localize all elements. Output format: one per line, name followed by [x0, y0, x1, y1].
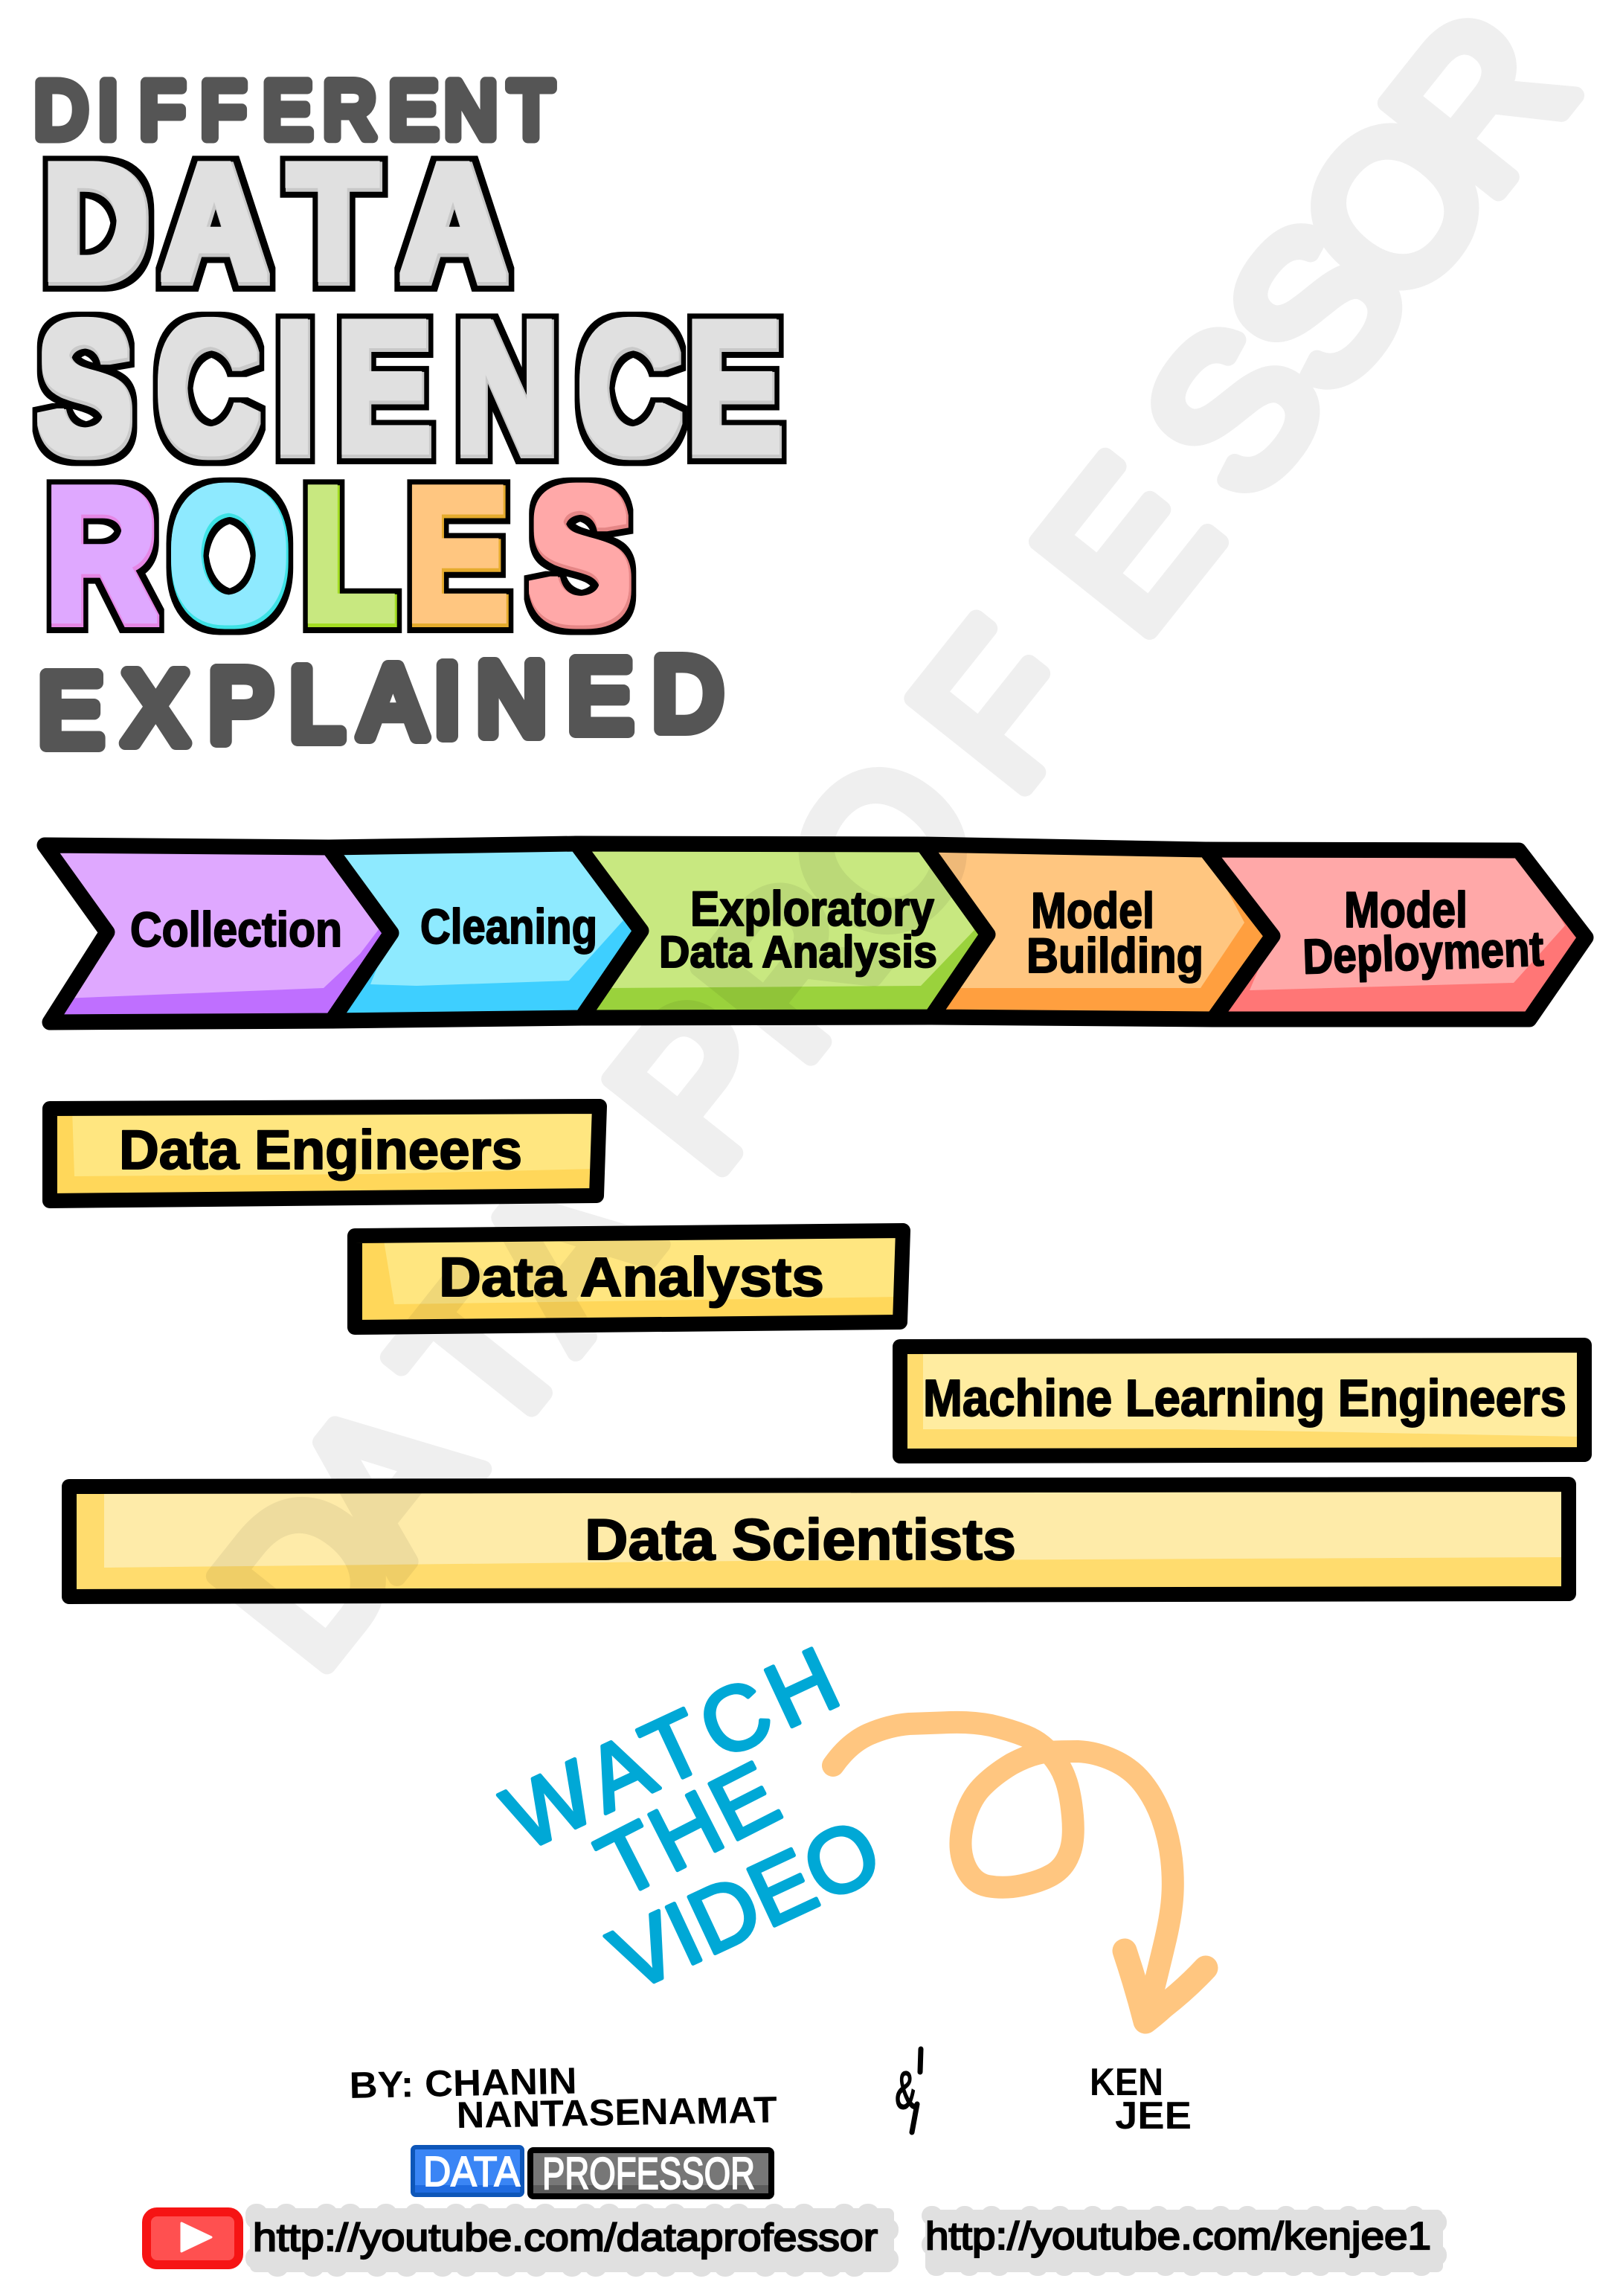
author: Chanin Nantasenamat [349, 2060, 777, 2136]
title line: DATA: DATA [44, 132, 507, 315]
chevron: Collection: Collection [130, 902, 342, 957]
callout word: THE: THE [582, 1742, 794, 1917]
chevron: Cleaning: Cleaning [420, 899, 597, 954]
role bar: Data Scientists: Data Scientists [585, 1507, 1016, 1572]
ampersand [894, 2049, 921, 2132]
logo: Data Professor [413, 2147, 771, 2199]
url text: http://youtube.com/dataprofessor [253, 2216, 878, 2260]
logo tile: DATA: DATA [423, 2148, 520, 2196]
url text: http://youtube.com/kenjee1 [925, 2215, 1431, 2258]
title line: ROLES: R [46, 451, 158, 662]
link: Data Professor channel [147, 2212, 888, 2266]
chevron: Model Building: Model [1031, 882, 1154, 939]
title line: ROLES: O [170, 451, 290, 662]
title line: DIFFERENT: DIFFERENT [34, 65, 553, 155]
chevron: Cleaning [329, 844, 641, 1021]
title line: ROLES: L [302, 451, 397, 662]
role bar: Data Analysts [355, 1231, 903, 1327]
author: Chanin Nantasenamat: BY: CHANIN [349, 2060, 577, 2106]
pipeline chevrons [45, 844, 1586, 1022]
logo tile: PROFESSOR: PROFESSOR [542, 2149, 755, 2199]
ampersand: & [894, 2059, 918, 2121]
title line: SCIENCE: SCIENCE [37, 286, 783, 493]
role bar: Data Scientists [69, 1484, 1569, 1597]
chevron: Model Deployment: Deployment [1302, 920, 1545, 984]
link: Ken Jee channel [925, 2215, 1437, 2266]
role bar: Data Analysts: Data Analysts [439, 1246, 824, 1308]
author: Chanin Nantasenamat: NANTASENAMAT [456, 2088, 777, 2136]
callout word: VIDEO: VIDEO [596, 1799, 895, 2010]
chevron: Exploratory Data Analysis [576, 844, 988, 1018]
author: Ken Jee: KEN [1090, 2061, 1163, 2104]
title line: ROLES: E [407, 451, 510, 662]
chevron: Model Building: Building [1026, 928, 1203, 983]
author: Ken Jee: JEE [1115, 2094, 1192, 2138]
chevron: Collection [45, 845, 391, 1022]
chevron: Exploratory Data Analysis: Exploratory [690, 881, 934, 936]
chevron: Model Deployment [1206, 850, 1586, 1019]
chevron: Model Deployment: Model [1344, 882, 1468, 938]
watermark: DATA PROFESSOR: DATA PROFESSOR [170, 0, 1616, 1707]
author: Ken Jee [1090, 2061, 1192, 2138]
arrow: loop down to authors [833, 1722, 1206, 2021]
highlight blob [931, 2216, 1437, 2266]
title line: ROLES: S [530, 451, 632, 662]
highlight blob [256, 2214, 888, 2266]
role bar: Machine Learning Engineers [900, 1345, 1584, 1456]
title [34, 65, 783, 768]
role bar: Data Engineers: Data Engineers [119, 1119, 522, 1181]
icon: YouTube play button [147, 2212, 239, 2265]
role bar: Machine Learning Engineers: Machine Learning Engineers [923, 1369, 1566, 1427]
authors [349, 2049, 1192, 2138]
chevron: Model Building [923, 844, 1273, 1019]
role bar: Data Engineers [50, 1106, 600, 1201]
callout: watch the video [489, 1628, 895, 2010]
title line: EXPLAINED: EXPLAINED [38, 636, 723, 768]
callout word: WATCH: WATCH [489, 1628, 853, 1869]
chevron: Exploratory Data Analysis: Data Analysis [659, 927, 937, 977]
